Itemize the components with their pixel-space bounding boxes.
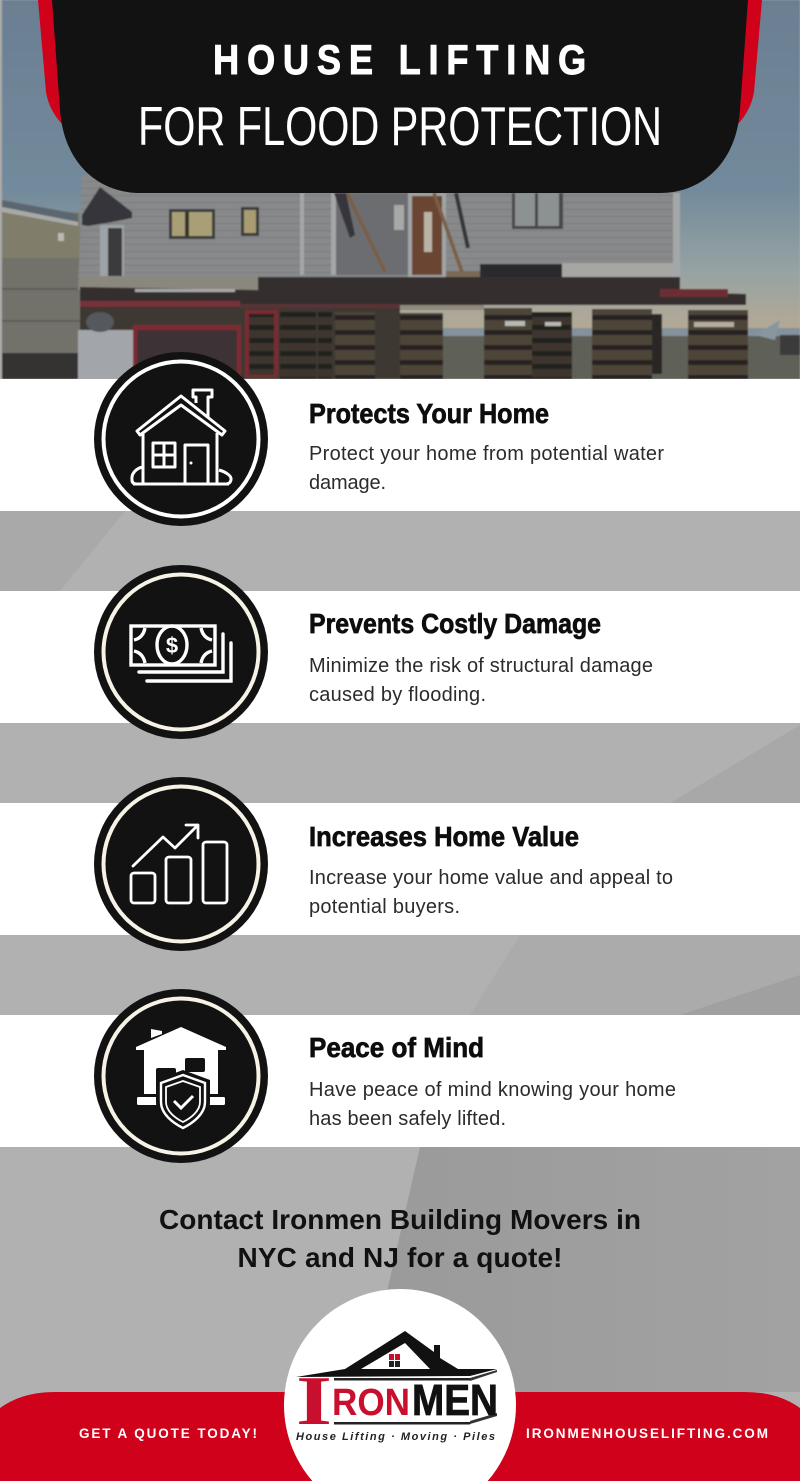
neighbouring building [2, 200, 82, 379]
red banner edges [38, 0, 762, 124]
house body [78, 175, 680, 290]
description: has been safely lifted. [309, 1108, 506, 1130]
distant ground [443, 320, 800, 379]
icon: house with shield [94, 989, 268, 1163]
call to action: Contact Ironmen Building Movers in [159, 1204, 641, 1235]
description: caused by flooding. [309, 684, 486, 706]
icon: money: $ [166, 633, 178, 658]
footer right text: IRONMENHOUSELIFTING.COM [526, 1426, 768, 1441]
panel: peace of mind [0, 1015, 800, 1147]
lifting equipment [78, 310, 278, 379]
panel: protects your home [0, 379, 800, 511]
footer bar [0, 1392, 800, 1481]
description [309, 443, 664, 494]
steel beams [80, 277, 746, 310]
description [309, 655, 653, 706]
heading: Increases Home Value [309, 821, 579, 852]
cribbing stacks [80, 308, 748, 379]
logo: RON [332, 1382, 410, 1424]
heading: Protects Your Home [309, 398, 549, 429]
icon: money [94, 565, 268, 739]
panel: increases home value [0, 803, 800, 935]
description: Protect your home from potential water [309, 443, 664, 465]
photo: house raised on cribbing [0, 0, 800, 379]
call to action: NYC and NJ for a quote! [238, 1242, 562, 1273]
title line 1: HOUSE LIFTING [213, 36, 594, 83]
description: Increase your home value and appeal to [309, 867, 673, 889]
description [309, 1079, 676, 1130]
footer left text: GET A QUOTE TODAY! [79, 1426, 257, 1441]
logo tagline: House Lifting · Moving · Piles [296, 1431, 495, 1443]
description: Have peace of mind knowing your home [309, 1079, 676, 1101]
logo roof [296, 1331, 497, 1424]
logo: MEN [412, 1376, 498, 1425]
heading: Prevents Costly Damage [309, 608, 601, 639]
icon: rising chart [94, 777, 268, 951]
description [309, 867, 673, 918]
description: damage. [309, 472, 386, 494]
description: Minimize the risk of structural damage [309, 655, 653, 677]
title banner [38, 0, 762, 193]
description: potential buyers. [309, 896, 460, 918]
icon: house [94, 352, 268, 526]
black banner [52, 0, 748, 193]
panel: prevents costly damage [0, 591, 800, 723]
heading: Peace of Mind [309, 1032, 484, 1063]
logo wordmark: I [296, 1363, 332, 1440]
logo [284, 1289, 516, 1481]
call to action [159, 1204, 641, 1273]
